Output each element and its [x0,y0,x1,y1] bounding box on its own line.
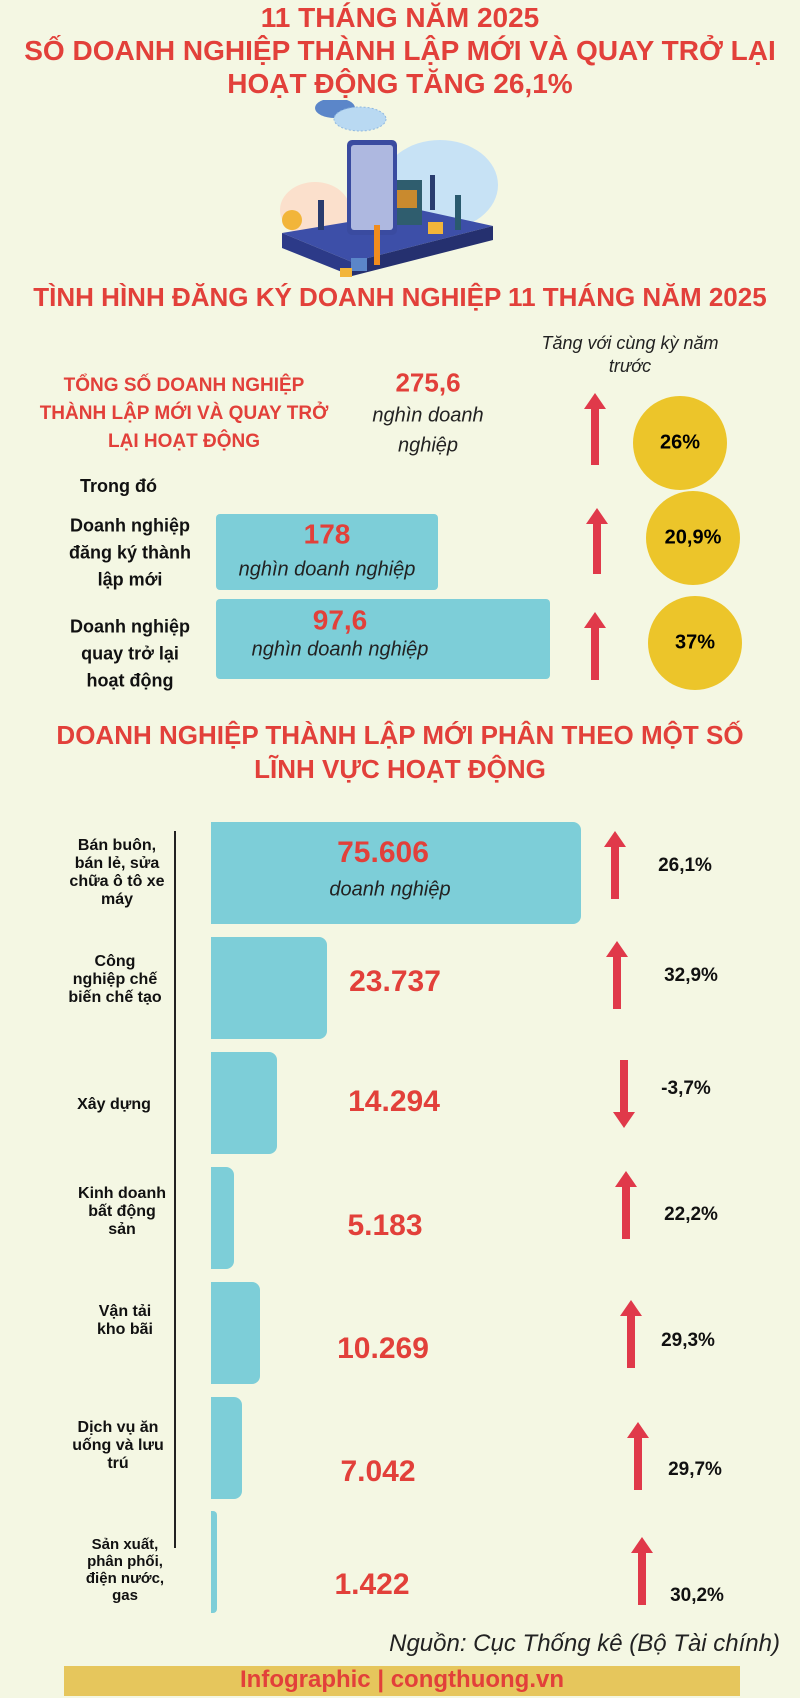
row: utilities: 30,2% [670,1585,724,1606]
row: manufacturing: Công [95,953,135,970]
row: real estate: 22,2% [664,1204,718,1225]
total label: THÀNH LẬP MỚI VÀ QUAY TRỞ [40,403,328,424]
row: utilities: 1.422 [334,1568,410,1601]
row: wholesale: chữa ô tô xe [69,873,165,890]
circle: 20,9% [646,491,740,585]
value: 178 [239,518,415,580]
value: 97,6: nghìn doanh nghiệp [252,638,428,660]
comparison note [542,333,718,376]
circle: 26% [633,396,727,490]
label: return: quay trở lại [81,644,179,664]
circle: 20,9%: 20,9% [665,526,721,548]
value: 178: 178 [304,518,350,550]
total label: TỔNG SỐ DOANH NGHIỆP [64,375,304,396]
title [24,2,776,99]
axis line [174,831,176,1548]
row: construction: 14.294 [348,1085,440,1118]
source note: Nguồn: Cục Thống kê (Bộ Tài chính) [389,1630,780,1657]
row: real estate: sản [108,1221,136,1238]
row: transport: kho bãi [97,1321,153,1338]
value: 178: nghìn doanh nghiệp [239,558,415,580]
row: transport [97,1282,715,1384]
row: construction: Xây dựng [77,1096,151,1113]
row: transport: 10.269 [337,1332,429,1365]
title: SỐ DOANH NGHIỆP THÀNH LẬP MỚI VÀ QUAY TRỞ LẠI [24,35,776,66]
label: return: Doanh nghiệp [70,616,190,636]
row: wholesale: Bán buôn, [78,837,156,854]
row: manufacturing: nghiệp chế [73,971,157,988]
bar: new 178 [216,514,438,590]
title: 11 THÁNG NĂM 2025 [261,2,539,33]
label: new: Doanh nghiệp [70,516,190,536]
row: food and lodging: uống và lưu [72,1437,164,1454]
row: wholesale [69,822,712,924]
section heading: sectors: LĨNH VỰC HOẠT ĐỘNG [254,754,546,784]
row: food and lodging: 29,7% [668,1459,722,1480]
row: utilities: Sản xuất, [92,1536,158,1553]
trong do: Trong đó [80,476,157,496]
section heading: registration: TÌNH HÌNH ĐĂNG KÝ DOANH NGHIỆP 11 THÁNG NĂM 2025 [33,282,767,312]
comparison note: trước [609,356,651,376]
arrow: return up [584,612,606,680]
label: new: đăng ký thành [69,542,191,562]
row: food and lodging: 7.042 [340,1455,416,1488]
comparison note: Tăng với cùng kỳ năm [542,333,718,353]
row: utilities: phân phối, [87,1553,163,1570]
row: wholesale: 75.606 [337,836,429,869]
total value: nghìn doanh [372,404,484,426]
label: return: hoạt động [86,670,173,690]
row: wholesale: 26,1% [658,855,712,876]
row: utilities: gas [112,1587,138,1604]
section heading: sectors [56,720,744,784]
footer banner [64,1666,740,1696]
illustration: business platform [280,100,498,277]
row: food and lodging: trú [107,1455,129,1472]
row: construction [77,1052,711,1154]
circle: 37% [648,596,742,690]
total value: nghiệp [398,434,458,456]
label: new [69,516,191,590]
row: food and lodging: Dịch vụ ăn [78,1419,158,1436]
arrow: total up [584,393,606,465]
value: 97,6: 97,6 [313,604,367,636]
total value [372,368,484,456]
total value: 275,6 [395,368,461,398]
row: real estate: Kinh doanh [78,1185,166,1202]
bar: return 97,6 [216,599,550,679]
total label: LẠI HOẠT ĐỘNG [108,431,260,452]
circle: 37%: 37% [675,632,715,654]
row: manufacturing: 32,9% [664,965,718,986]
label: return [70,616,190,690]
row: food and lodging [72,1397,722,1499]
row: utilities: điện nước, [86,1570,164,1587]
footer banner: Infographic | congthuong.vn [240,1666,564,1693]
row: real estate [78,1167,718,1269]
section heading: sectors: DOANH NGHIỆP THÀNH LẬP MỚI PHÂN THEO MỘT SỐ [56,720,744,750]
row: manufacturing: 23.737 [349,965,441,998]
row: real estate: 5.183 [347,1209,423,1242]
row: utilities [86,1511,724,1613]
circle: 26%: 26% [660,432,700,454]
row: wholesale: doanh nghiệp [329,878,451,900]
row: wholesale: máy [101,891,133,908]
sector chart [68,822,724,1613]
value: 97,6 [252,604,428,660]
arrow: new up [586,508,608,574]
row: manufacturing: biến chế tạo [68,989,162,1006]
label: new: lập mới [98,570,162,590]
total label [40,374,328,452]
row: wholesale: bán lẻ, sửa [75,855,159,872]
row: transport: Vận tải [99,1303,151,1320]
row: real estate: bất động [88,1203,156,1220]
row: transport: 29,3% [661,1330,715,1351]
row: construction: -3,7% [661,1078,711,1099]
row: manufacturing [68,937,718,1039]
title: HOẠT ĐỘNG TĂNG 26,1% [227,68,573,99]
